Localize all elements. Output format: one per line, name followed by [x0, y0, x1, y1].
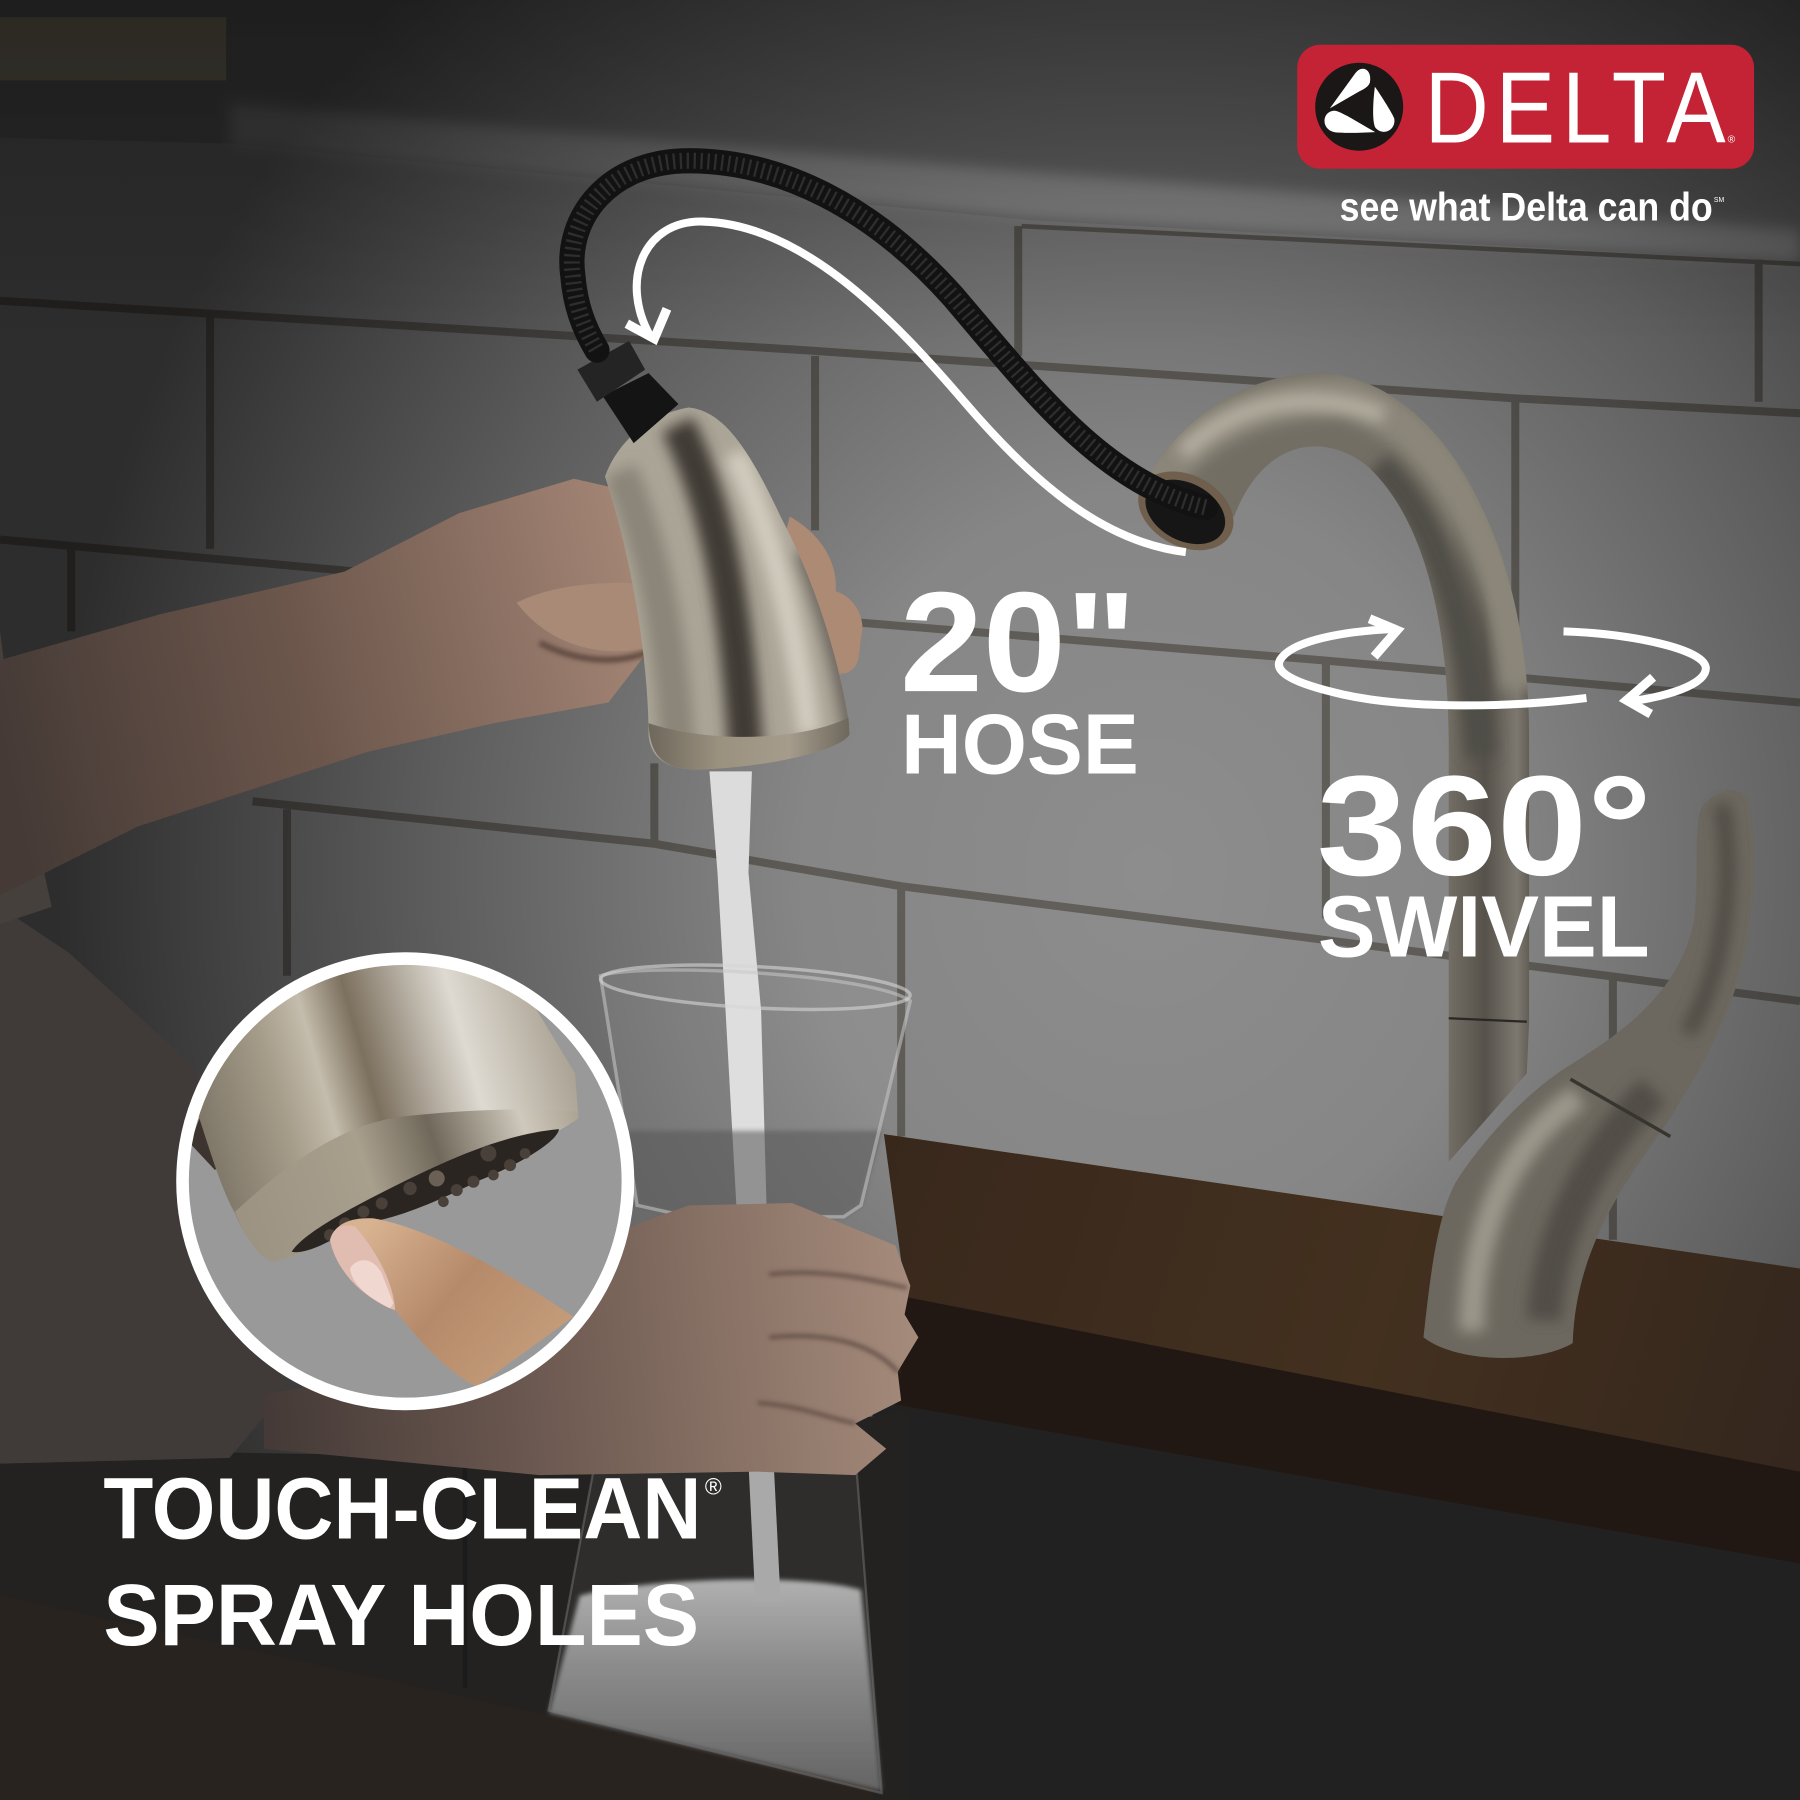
hose stub behind head [192, 1118, 216, 1170]
arrow: 20 inch hose path [627, 222, 1186, 552]
spray head [597, 402, 855, 775]
thumbnail [637, 587, 692, 626]
label: 360 swivel [1317, 747, 1652, 975]
label: touch-clean spray holes: SPRAY HOLES [103, 1567, 699, 1664]
spout mouth [1125, 456, 1247, 566]
sweater [0, 907, 287, 1464]
Delta logo [1297, 45, 1754, 229]
braided hose [572, 161, 1205, 507]
wordmark: DELTA [1425, 52, 1726, 165]
label: 20 inch hose [900, 563, 1139, 792]
spout [1145, 373, 1529, 1162]
label: 20 inch hose: HOSE [901, 697, 1139, 792]
finger [330, 1218, 573, 1387]
arrows: 360 swivel [1279, 619, 1706, 714]
spray head close-up [199, 964, 578, 1232]
lower stream [748, 1464, 781, 1601]
label: 360 swivel: SWIVEL [1318, 878, 1650, 975]
label: touch-clean spray holes: ® [705, 1474, 722, 1500]
upper arm and hand [0, 479, 862, 895]
label: touch-clean spray holes [103, 1460, 722, 1664]
head base ring [649, 717, 849, 769]
faucet body and handle [1125, 373, 1754, 1358]
sweater cuff [0, 631, 52, 924]
Delta logo: ® [1728, 134, 1736, 145]
spray face [292, 1129, 559, 1252]
label: 360 swivel: 360° [1317, 747, 1652, 906]
countertop and sink [0, 1134, 1800, 1800]
fingernail [350, 1260, 393, 1308]
nozzles [324, 1145, 530, 1241]
foam [549, 1580, 882, 1791]
glass [549, 958, 911, 1793]
water stream [709, 771, 767, 1217]
hand holding glass [264, 1203, 918, 1475]
tagline: see what Delta can do [1340, 184, 1713, 229]
label: 20 inch hose: 20" [900, 563, 1136, 722]
icon: delta emblem [1315, 63, 1403, 151]
under-cabinet molding [0, 0, 1800, 262]
callout circle: touch-clean spray holes [180, 940, 628, 1404]
lower body [1423, 791, 1754, 1358]
hose connector [577, 341, 678, 443]
label: touch-clean spray holes: TOUCH-CLEAN [103, 1460, 701, 1557]
fingers [781, 517, 862, 677]
Delta logo: SM [1714, 197, 1724, 204]
